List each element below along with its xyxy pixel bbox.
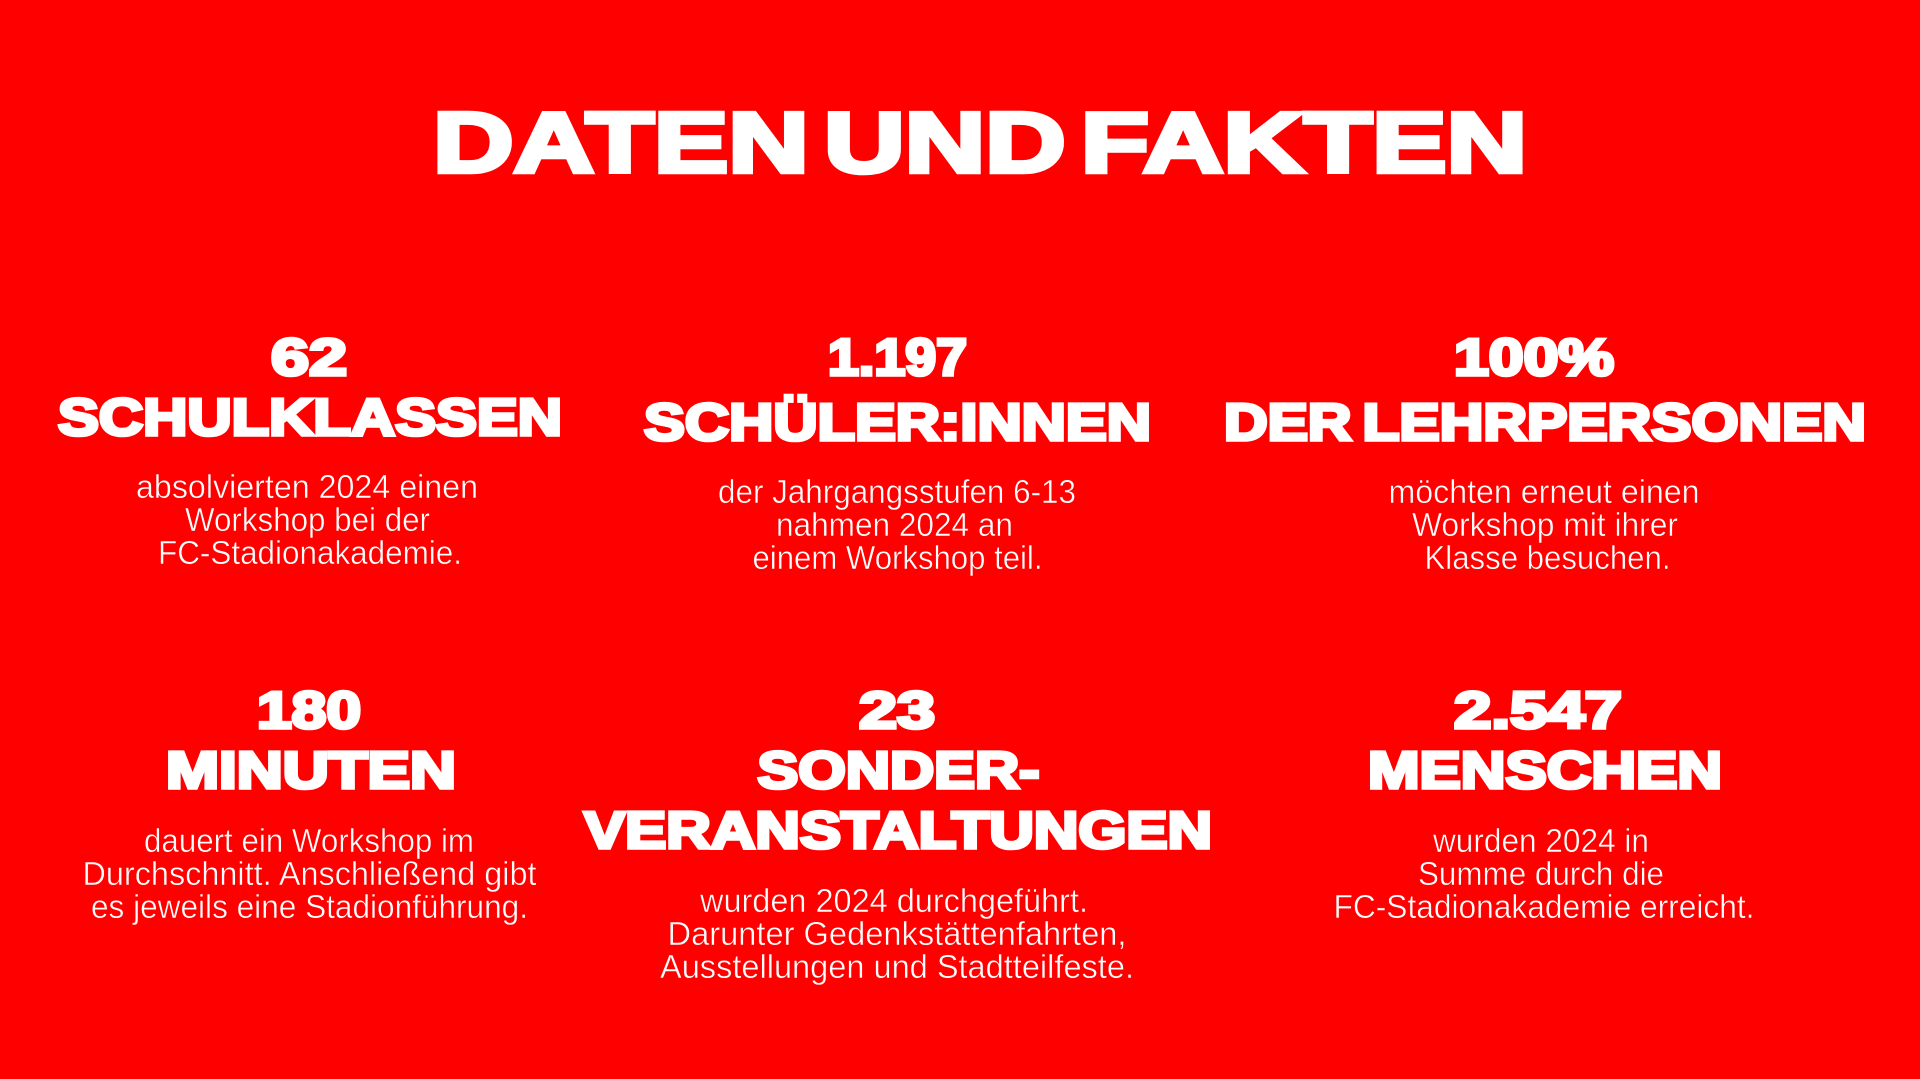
text block: Schulklassen description	[136, 468, 478, 571]
text block: Menschen description: Summe durch die	[1418, 855, 1664, 892]
text block: Minuten description: dauert ein Workshop im	[144, 822, 474, 859]
title: DATEN UND FAKTEN	[433, 96, 1527, 191]
panel: Menschen	[1334, 682, 1754, 925]
heading: Schüler:innen: SCHÜLER:INNEN	[644, 394, 1151, 452]
heading: Minuten: MINUTEN	[166, 742, 456, 800]
text block: Minuten description	[82, 822, 536, 925]
panel: Sonderveranstaltungen	[584, 682, 1212, 985]
heading: Menschen: MENSCHEN	[1368, 742, 1722, 800]
text block: Menschen description: wurden 2024 in	[1432, 822, 1649, 859]
text block: Lehrpersonen description: möchten erneut einen	[1388, 473, 1700, 510]
panel: Schüler:innen	[644, 329, 1151, 576]
text block: Schüler:innen description: einem Workshop teil.	[752, 539, 1042, 576]
text block: Sonderveranstaltungen description: Ausstellungen und Stadtteilfeste.	[660, 948, 1134, 985]
panel: Lehrpersonen	[1224, 329, 1866, 576]
panel: Schulklassen	[58, 329, 562, 571]
text block: Schulklassen description: absolvierten 2024 einen	[136, 468, 478, 505]
number: 62: 62	[271, 329, 347, 387]
number: 100%: 100%	[1454, 329, 1614, 387]
heading: Schulklassen: SCHULKLASSEN	[58, 389, 562, 447]
text block: Sonderveranstaltungen description: Darunter Gedenkstättenfahrten,	[668, 915, 1126, 952]
number: 23: 23	[859, 682, 935, 740]
text block: Schüler:innen description: der Jahrgangsstufen 6-13	[718, 473, 1076, 510]
heading: Sonderveranstaltungen	[584, 742, 1212, 860]
text block: Lehrpersonen description	[1388, 473, 1700, 576]
text block: Minuten description: es jeweils eine Stadionführung.	[91, 888, 528, 925]
text block: Schüler:innen description	[718, 473, 1076, 576]
heading: der Lehrpersonen: DER LEHRPERSONEN	[1224, 394, 1866, 452]
number: 180: 180	[257, 682, 361, 740]
text block: Minuten description: Durchschnitt. Anschließend gibt	[82, 855, 536, 892]
text block: Sonderveranstaltungen description: wurden 2024 durchgeführt.	[699, 882, 1088, 919]
text block: Schüler:innen description: nahmen 2024 an	[776, 506, 1013, 543]
number: 1.197: 1.197	[828, 329, 967, 387]
text block: Lehrpersonen description: Klasse besuchen.	[1424, 539, 1670, 576]
text block: Sonderveranstaltungen description	[660, 882, 1134, 985]
text block: Lehrpersonen description: Workshop mit ihrer	[1412, 506, 1678, 543]
text block: Schulklassen description: Workshop bei der	[185, 501, 430, 538]
text block: Menschen description	[1334, 822, 1754, 925]
text block: Schulklassen description: FC-Stadionakademie.	[158, 534, 462, 571]
heading: Sonderveranstaltungen: SONDER-	[758, 742, 1040, 800]
panel: Minuten	[82, 682, 536, 925]
number: 2.547: 2.547	[1454, 682, 1622, 740]
text block: Menschen description: FC-Stadionakademie erreicht.	[1334, 888, 1754, 925]
heading: Sonderveranstaltungen: VERANSTALTUNGEN	[584, 802, 1212, 860]
